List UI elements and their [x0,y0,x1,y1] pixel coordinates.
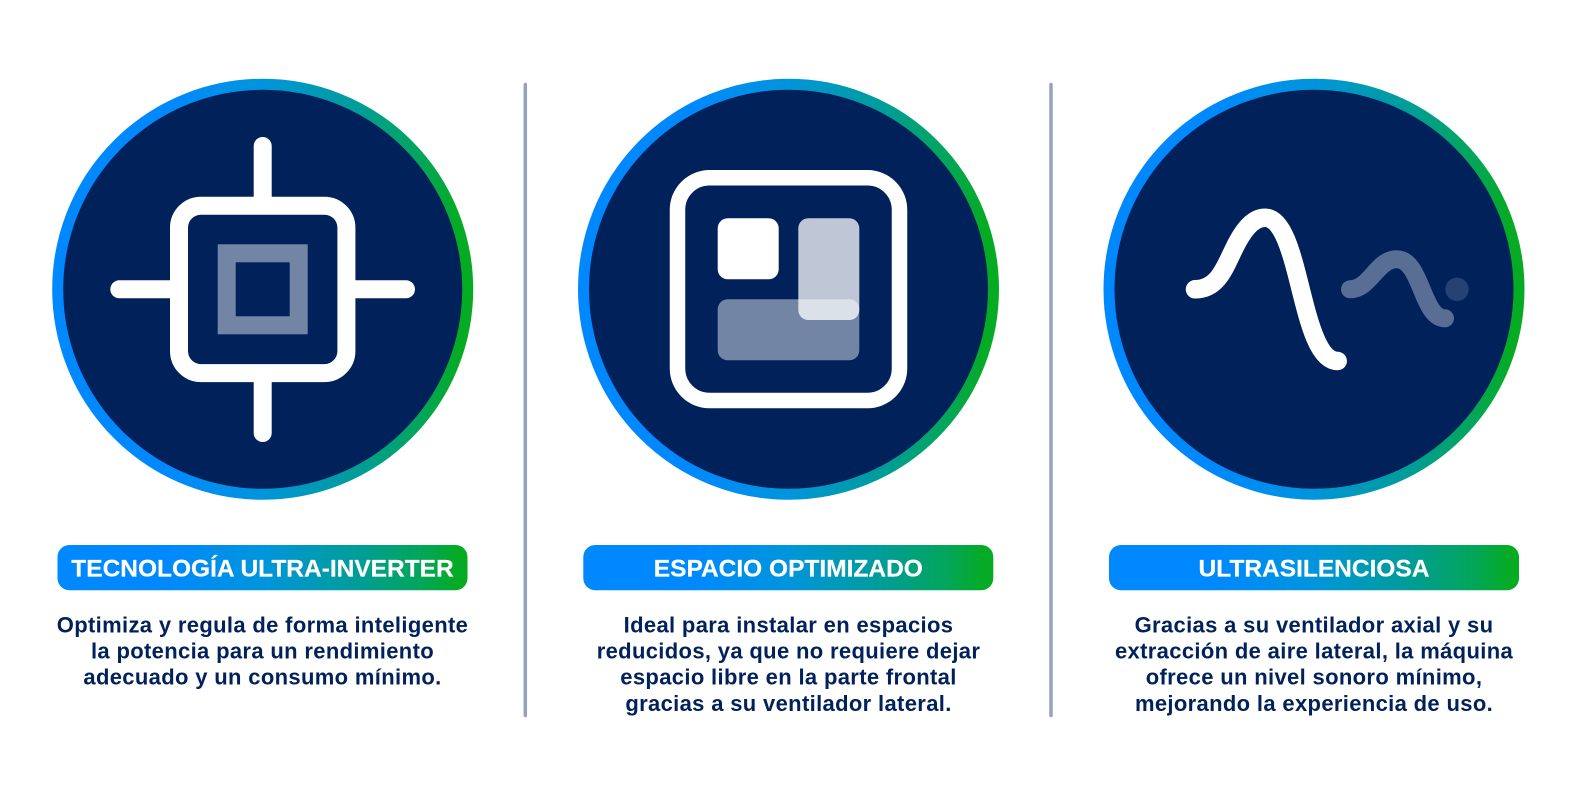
panel: tecnología ultra-inverter [57,84,468,690]
divider left [524,84,527,716]
text block: gracias a su ventilador lateral. [625,691,952,716]
text block: Optimiza y regula de forma inteligente [57,612,468,637]
text block: extracción de aire lateral, la máquina [1115,638,1513,664]
text block: mejorando la experiencia de uso. [1135,691,1493,716]
panel: ultrasilenciosa [1109,84,1519,716]
icon: chip [58,84,468,494]
text block [597,612,980,716]
heading badge: ESPACIO OPTIMIZADO [654,556,923,583]
text block: espacio libre en la parte frontal [620,665,957,690]
heading badge [1109,545,1519,590]
text block: reducidos, ya que no requiere dejar [597,638,980,664]
text block: adecuado y un consumo mínimo. [83,665,442,690]
panel: espacio optimizado [583,84,994,716]
heading badge: ULTRASILENCIOSA [1199,556,1430,583]
text block: Gracias a su ventilador axial y su [1135,612,1493,637]
text block: Ideal para instalar en espacios [624,612,953,637]
heading badge: TECNOLOGÍA ULTRA-INVERTER [71,555,454,583]
text block [57,612,468,690]
heading badge [583,545,993,590]
heading badge [58,545,468,590]
divider right [1049,84,1053,716]
text block: la potencia para un rendimiento [91,638,434,664]
icon: layout [584,84,994,494]
text block [1115,612,1513,716]
text block: ofrece un nivel sonoro mínimo, [1146,665,1482,690]
icon: sound wave [1109,84,1519,494]
